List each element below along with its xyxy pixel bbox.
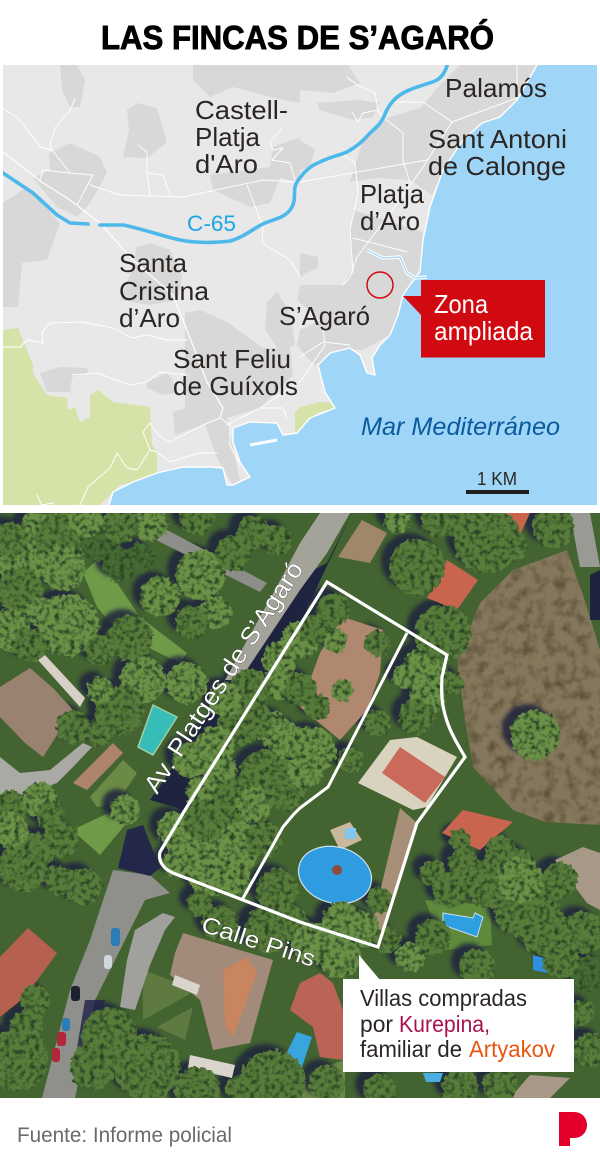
road label: Calle Pins: Calle Pins: [198, 911, 319, 972]
main avenue: [42, 513, 352, 1098]
place labels: d'Aro: [195, 149, 258, 179]
place labels: S’Agaró: [279, 301, 370, 331]
houses: [0, 513, 600, 1098]
scale bar: [466, 472, 529, 494]
callout: villas: Artyakov: [469, 1036, 555, 1062]
zoom location circle: [367, 272, 393, 298]
place labels: d’Aro: [119, 303, 180, 333]
panel: location map: [3, 65, 597, 505]
callout: villas: familiar de: [360, 1036, 462, 1062]
place labels: Sant Feliu: [173, 344, 291, 374]
side roads: [0, 513, 600, 1010]
coastline: [109, 65, 537, 505]
local roads: [3, 65, 517, 505]
logo: [559, 1112, 587, 1146]
source note: Fuente: Informe policial: [17, 1124, 232, 1147]
protected green area: [3, 328, 335, 505]
callout: zona ampliada: ampliada: [434, 316, 534, 346]
place labels: Castell-: [195, 95, 288, 125]
parcel outlines: [160, 582, 465, 947]
callout: villas: [343, 955, 574, 1072]
place labels: Platja: [360, 179, 425, 209]
sea: [109, 65, 597, 505]
port pier: [250, 440, 277, 445]
place labels: de Calonge: [428, 151, 566, 181]
callout: villas: Villas compradas: [360, 985, 527, 1011]
dry field: [457, 550, 600, 825]
scale bar: 1 KM: [477, 469, 517, 489]
motorway C-65: [3, 66, 447, 242]
callout: villas: por: [360, 1011, 393, 1037]
place labels: [119, 73, 567, 401]
trees: [0, 502, 600, 1113]
tree shadows: [0, 496, 596, 1107]
road label: Av. Platges de S'Agaró: Av. Platges de S’Agaró: [139, 557, 309, 798]
callout: zona ampliada: Zona: [434, 289, 488, 319]
parked cars: [52, 928, 120, 1062]
place labels: d’Aro: [360, 206, 420, 236]
urban areas: [3, 65, 537, 505]
panel: aerial view: [0, 496, 600, 1113]
sea label: Mar Mediterráneo: [361, 413, 560, 441]
callout: zona ampliada: [403, 280, 545, 358]
place labels: Palamós: [445, 73, 547, 103]
title: LAS FINCAS DE S’AGARÓ: [101, 19, 494, 56]
lawns: [72, 560, 492, 1098]
callout: villas: Kurepina,: [399, 1011, 490, 1037]
place labels: Sant Antoni: [428, 124, 567, 154]
place labels: Cristina: [119, 276, 210, 306]
plot grounds and villa: [300, 617, 457, 945]
pools: [138, 705, 570, 1082]
place labels: de Guíxols: [173, 371, 298, 401]
road label C-65: C-65: [187, 211, 236, 236]
place labels: Platja: [195, 122, 261, 152]
river estuary: [367, 250, 427, 278]
place labels: Santa: [119, 248, 188, 278]
